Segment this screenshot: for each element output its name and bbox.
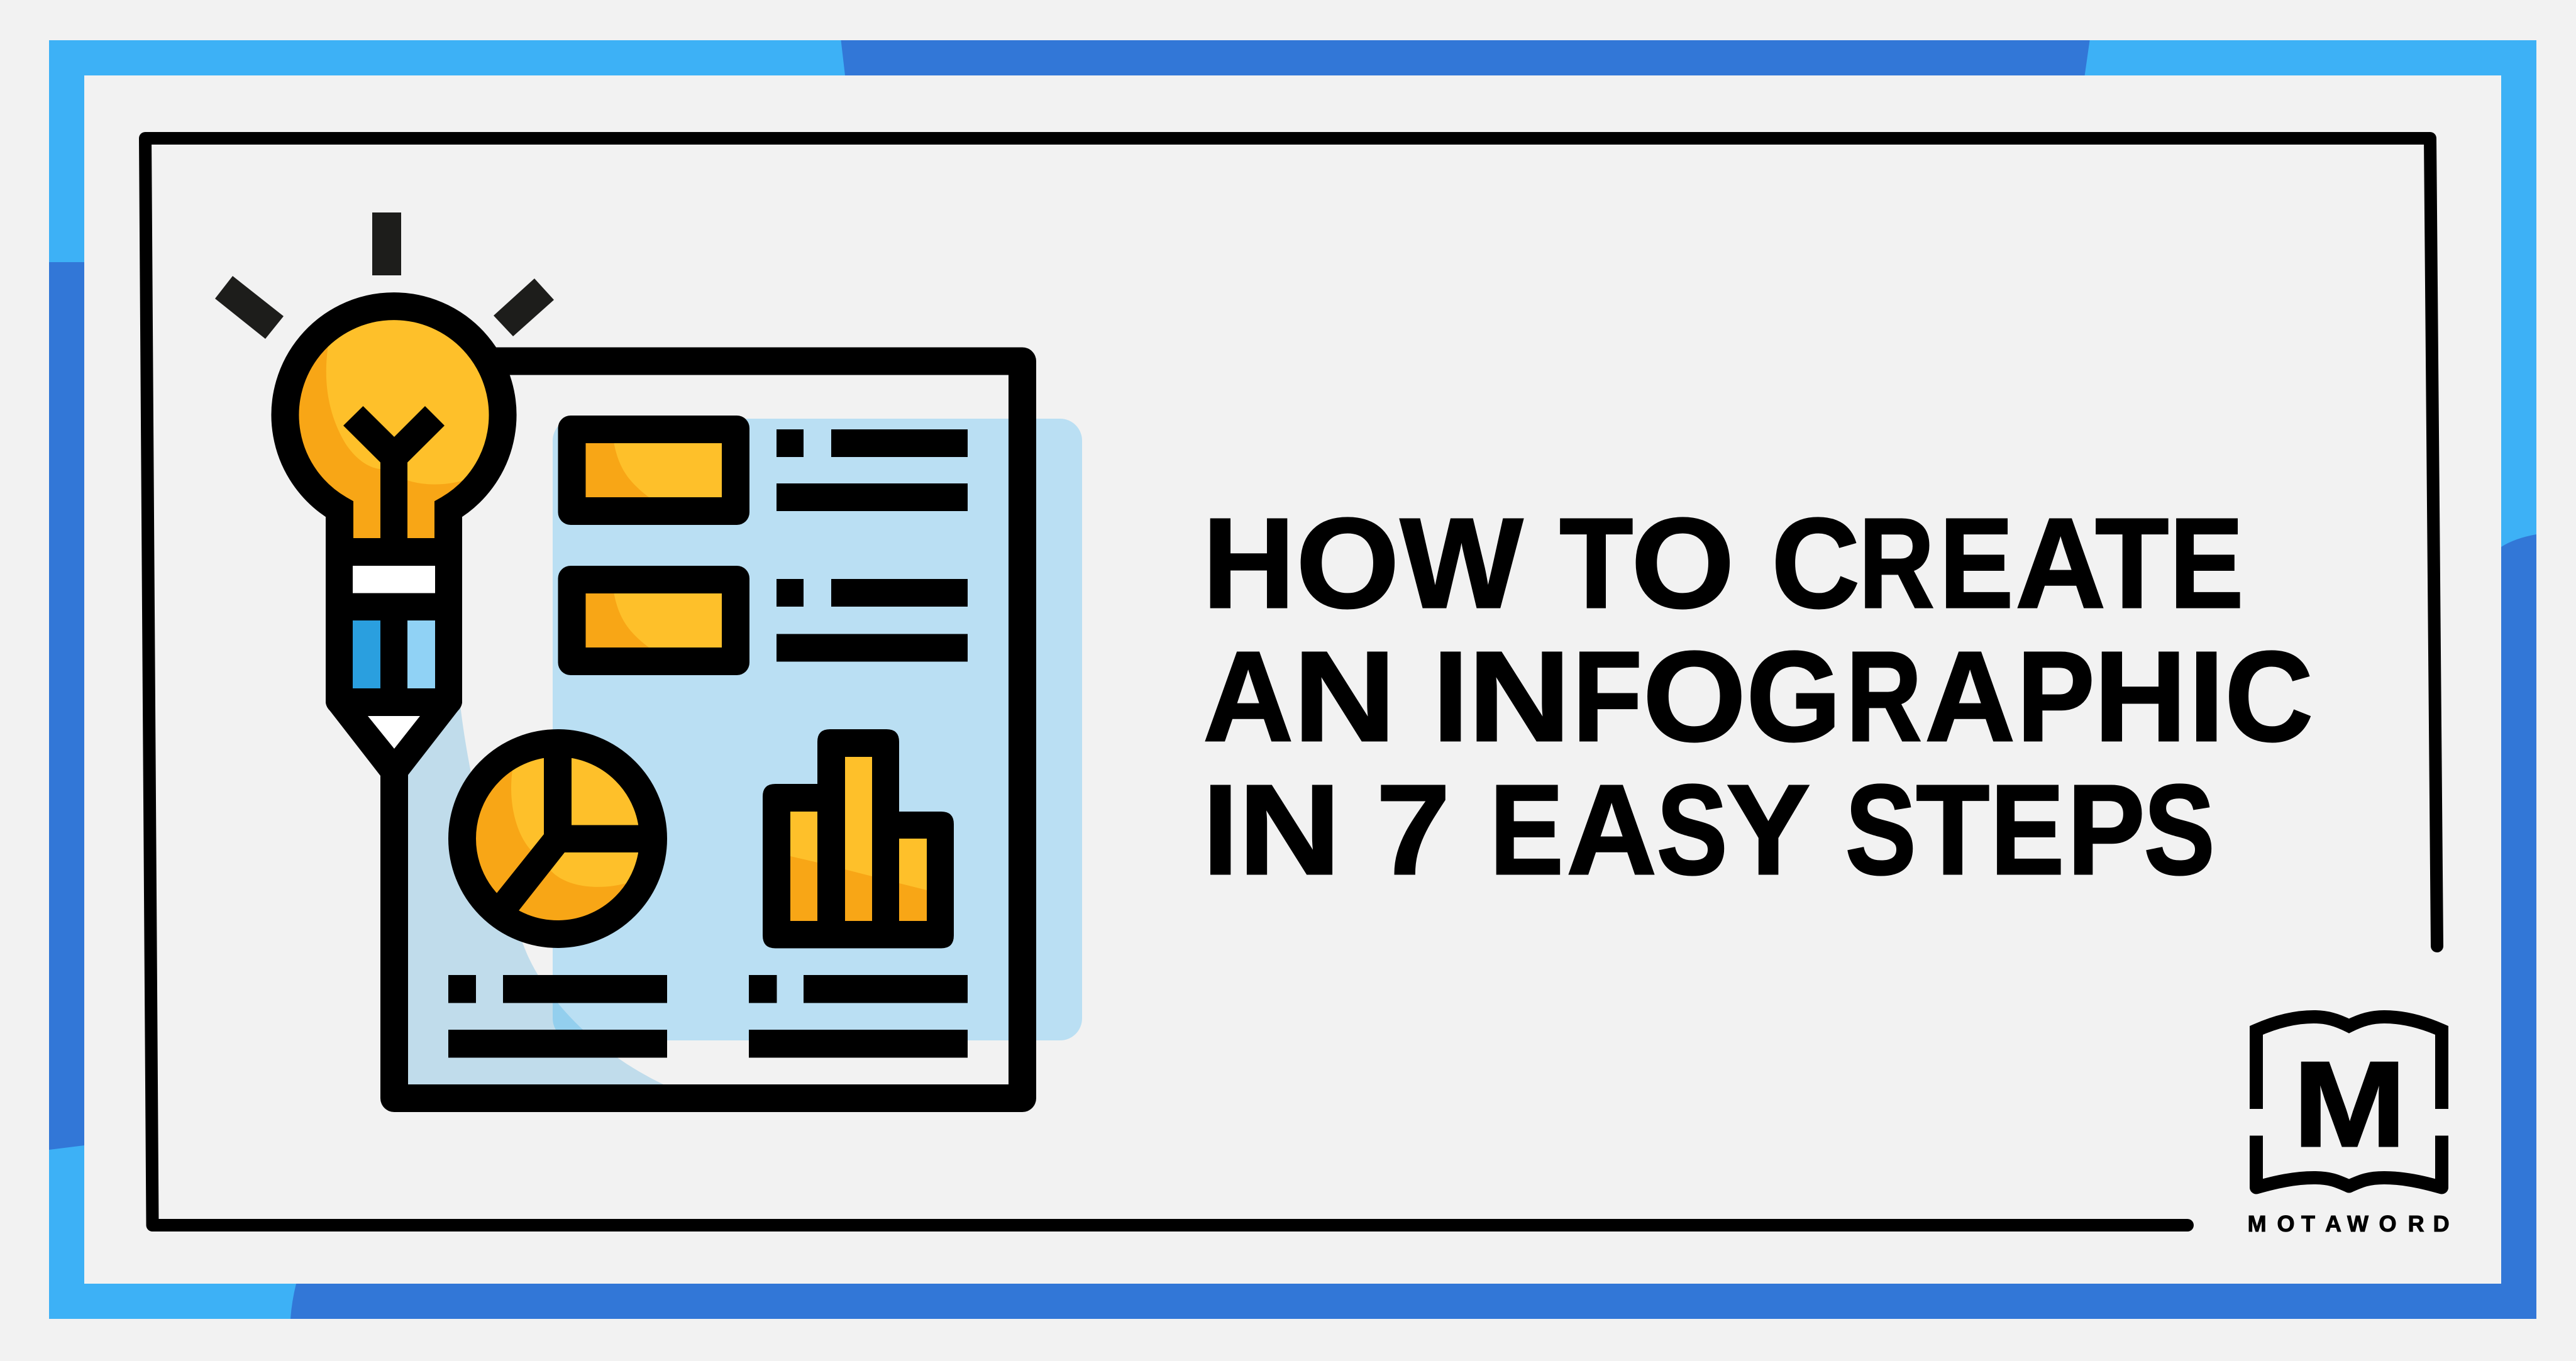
- title: E: [1940, 492, 2013, 635]
- bulb and shaft outline: [285, 306, 502, 698]
- title: Y: [1727, 758, 1810, 901]
- filament: [343, 406, 445, 547]
- title: N: [1468, 624, 1571, 768]
- title: R: [1859, 492, 1934, 635]
- title: C: [2225, 625, 2313, 768]
- title: I: [1433, 625, 1468, 768]
- title: N: [1293, 624, 1396, 768]
- title: P: [2017, 625, 2094, 768]
- illustration: document with lightbulb pencil: [215, 212, 1082, 1098]
- title: A: [2016, 492, 2106, 635]
- title: H: [1203, 492, 1295, 635]
- blue band left: [353, 620, 380, 688]
- title: 7: [1376, 758, 1451, 901]
- lightbulb pencil: [277, 306, 502, 792]
- white band: [353, 566, 435, 593]
- title: N: [1239, 758, 1341, 901]
- document outline: [394, 361, 1022, 1098]
- pie chart: [462, 742, 654, 943]
- pencil tip: [326, 692, 462, 792]
- title: T: [1916, 758, 1989, 901]
- soft shadow shape: [402, 692, 663, 1084]
- title: W: [1400, 492, 1523, 635]
- blue band right: [407, 620, 435, 688]
- title: A: [1925, 625, 2015, 768]
- logo book top: [2256, 1017, 2442, 1109]
- title: G: [1747, 625, 1841, 768]
- title: O: [1631, 492, 1734, 634]
- bulb fill: [285, 306, 502, 538]
- title: F: [1573, 625, 1642, 768]
- title: E: [1991, 759, 2064, 901]
- pencil bands: [326, 538, 462, 698]
- logo: MotaWord: [2248, 1017, 2450, 1237]
- title: R: [1846, 625, 1921, 768]
- text lines 1: [777, 429, 968, 511]
- title: T: [1559, 492, 1633, 634]
- title: A: [1203, 625, 1293, 768]
- title: I: [1203, 759, 1238, 901]
- title: E: [1490, 759, 1564, 901]
- text lines 2: [777, 579, 968, 661]
- title: S: [1845, 758, 1916, 901]
- pencil tip white: [368, 716, 420, 749]
- title: A: [1567, 758, 1657, 901]
- title: [1203, 492, 2313, 901]
- title: O: [1643, 625, 1746, 768]
- light rays: [215, 212, 554, 339]
- logo M: M: [2293, 1036, 2406, 1172]
- text lines under pie chart: [448, 975, 667, 1057]
- title: S: [2144, 758, 2215, 901]
- title: C: [1772, 492, 1860, 635]
- title: E: [2170, 492, 2243, 635]
- bulb shading: [299, 347, 463, 538]
- image block 1: [558, 416, 749, 525]
- text lines under bar chart: [749, 975, 968, 1057]
- title: O: [1296, 492, 1399, 634]
- shadow overlap with panel: [553, 1003, 583, 1030]
- image block 2: [558, 566, 749, 675]
- title: P: [2067, 759, 2145, 901]
- title: S: [1657, 758, 1728, 901]
- title: I: [2189, 625, 2224, 768]
- thin black inner frame line: [145, 138, 2437, 1225]
- logo book bottom: [2256, 1135, 2442, 1187]
- light blue panel behind document: [553, 419, 1082, 1040]
- title: H: [2094, 625, 2187, 768]
- title: T: [2095, 492, 2169, 634]
- bar chart: [763, 729, 954, 948]
- logo wordmark: MOTAWORD: [2248, 1211, 2450, 1237]
- bulb neck fillets: [340, 493, 448, 510]
